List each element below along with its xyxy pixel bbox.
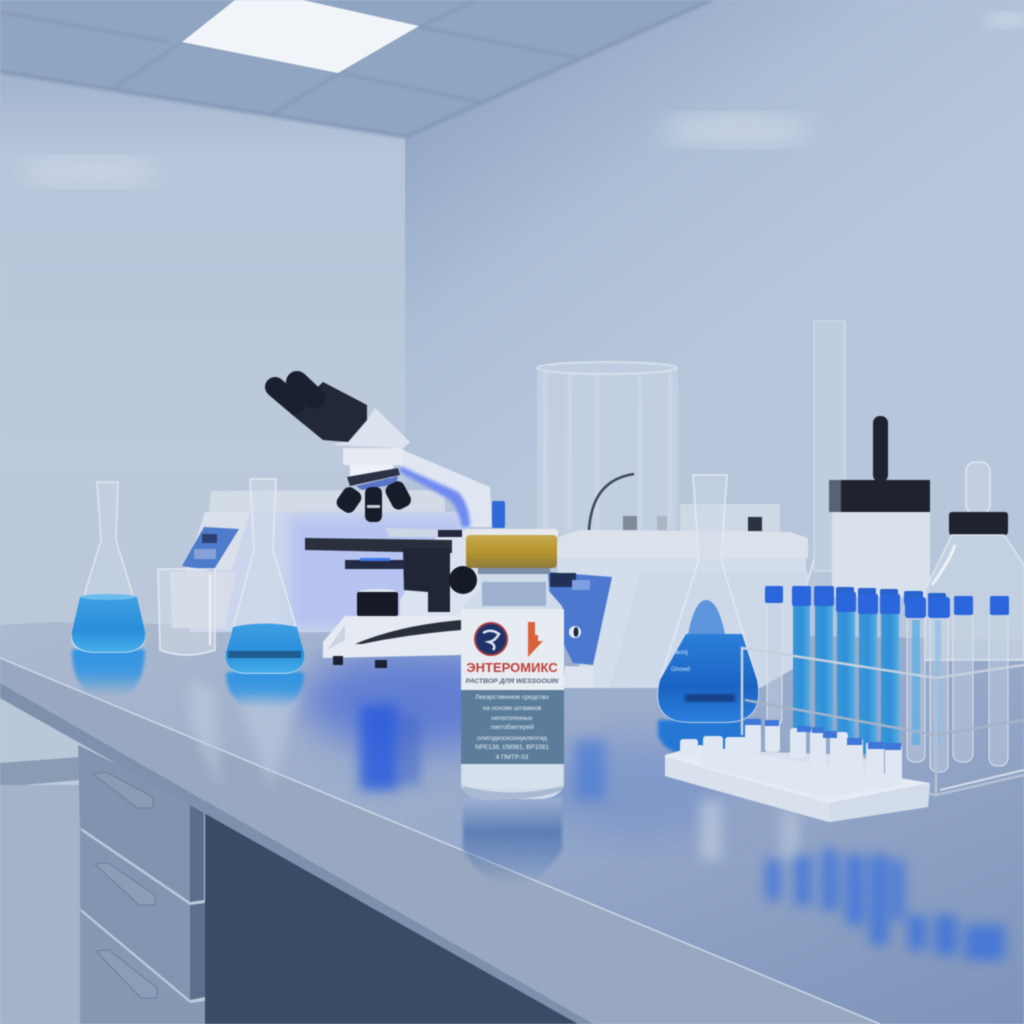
- base: [323, 616, 470, 658]
- vial: Enteromix: [461, 529, 564, 800]
- label description: непатогенных: [492, 715, 533, 722]
- test tubes: [765, 586, 1009, 772]
- stage: [305, 538, 452, 553]
- objectives: [334, 479, 413, 522]
- flask middle: [226, 479, 304, 673]
- eyepieces and head: [275, 382, 367, 442]
- right wall: [405, 0, 1024, 700]
- flask reflections: [72, 646, 145, 696]
- glass jar: [537, 362, 780, 535]
- right centrifuge: [548, 530, 808, 688]
- ceiling: [0, 0, 712, 137]
- label description: лактобактерий: [490, 723, 534, 731]
- left centrifuge: [170, 490, 470, 632]
- liquid base: [463, 764, 562, 788]
- white vial tray: [665, 719, 930, 822]
- vial reflection: [463, 798, 562, 885]
- back caps: [836, 587, 946, 607]
- label top: [461, 609, 564, 691]
- head housing: [332, 408, 410, 448]
- drawer 2: [80, 830, 205, 1000]
- small vials: [680, 722, 902, 798]
- counter front edge: [0, 658, 880, 1024]
- floor and base: [0, 680, 100, 1024]
- drawer 3: [80, 911, 205, 1024]
- wall reflections: [18, 157, 162, 187]
- label description: на основе штаммов: [483, 705, 542, 712]
- black-capped bottle: [829, 416, 930, 597]
- left wall: [0, 72, 405, 770]
- blue cap: [492, 501, 505, 528]
- counter reflections: [300, 650, 730, 840]
- front flask: [658, 475, 758, 722]
- cabinet drawers: [78, 745, 605, 1024]
- front flask: Causij: [671, 650, 688, 656]
- label description: [475, 694, 549, 761]
- stainless counter: [0, 622, 1024, 1024]
- counter top surface: [0, 622, 1024, 1024]
- logo: [474, 622, 508, 656]
- control panel: [548, 572, 612, 665]
- dropper bottle: [925, 462, 1024, 660]
- ceiling light panel: [182, 0, 419, 73]
- base lens: [359, 589, 397, 595]
- glass body: [461, 568, 564, 799]
- vial: Enteromix: РАСТВОР ДЛЯ WESSGOUIN: [466, 678, 559, 685]
- label description: Лекарственное средство: [475, 694, 549, 701]
- wire rack: [742, 648, 1024, 795]
- product name: ЭНТЕРОМИКС: [466, 660, 558, 675]
- orange arrow: [528, 622, 543, 657]
- control screen: [182, 527, 239, 571]
- label description: 4 ПМТР-53: [496, 754, 529, 761]
- blue liquid: [793, 606, 810, 731]
- flask left: [72, 482, 145, 652]
- drawer 1: [78, 745, 204, 902]
- label lower band: [461, 690, 564, 764]
- microscope: [275, 382, 505, 668]
- label description: NPE138, IЛ8981, ВР1081: [475, 744, 549, 751]
- beaker: [158, 569, 215, 655]
- focus knob: [449, 566, 477, 594]
- tall cylinder: [805, 321, 860, 590]
- arm: [400, 450, 492, 527]
- nosepiece: [347, 468, 400, 486]
- crimp cap: [464, 529, 558, 538]
- label description: олигодезоксинуклеотид: [477, 735, 547, 742]
- column: [400, 530, 480, 620]
- caps front: [765, 586, 1009, 618]
- front flask: Ghowd: [671, 667, 690, 673]
- tube outlines: [767, 600, 1008, 772]
